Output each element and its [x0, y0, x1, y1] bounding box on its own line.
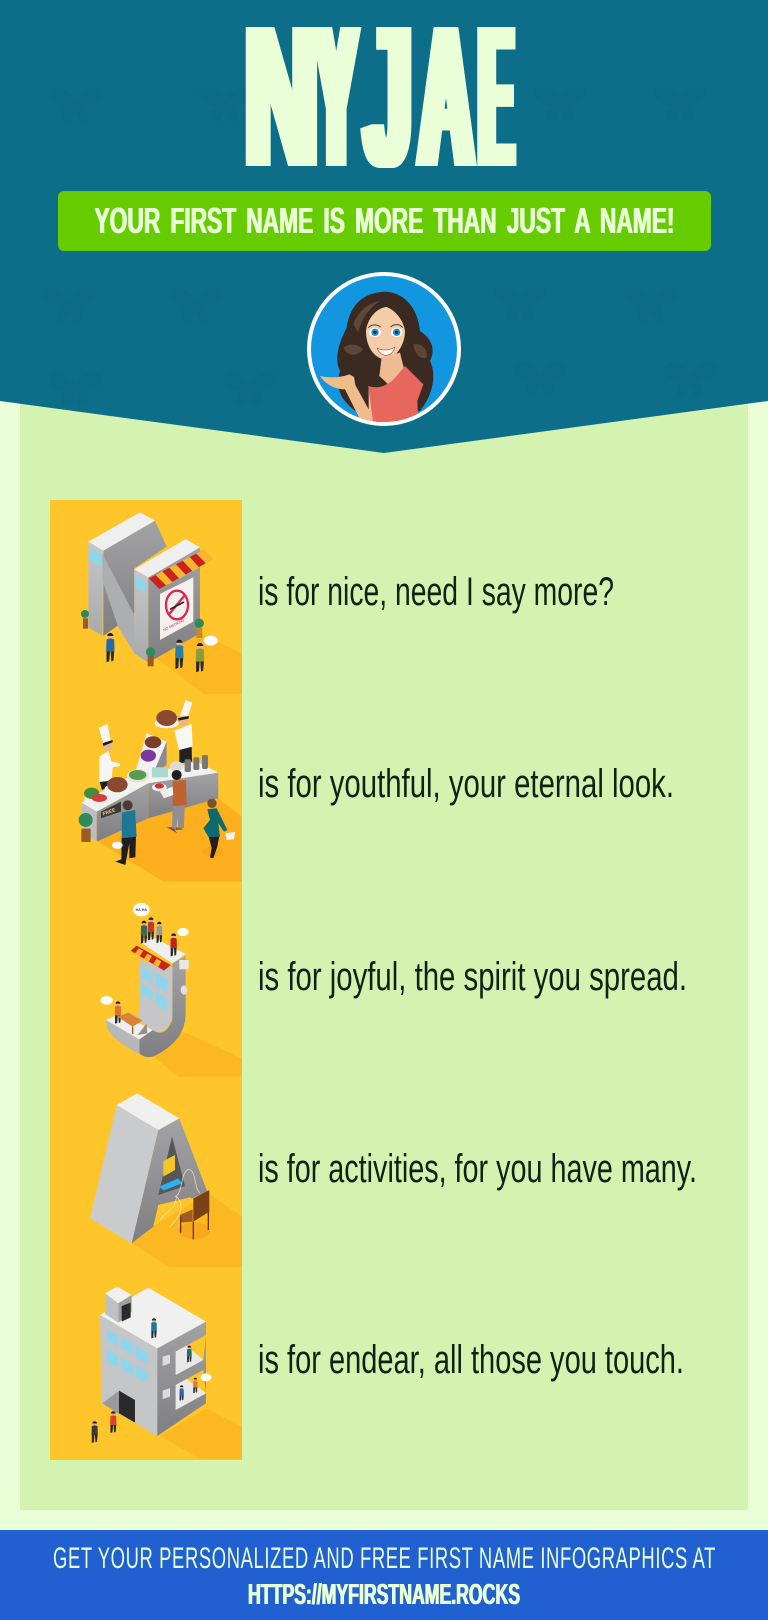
balconies [163, 1335, 211, 1410]
illustration: letter E building [92, 1287, 242, 1459]
desk and worker [101, 996, 147, 1035]
label: free [101, 802, 121, 818]
title [245, 0, 516, 209]
text: N: is for nice, need I say more? [258, 570, 614, 614]
label: free: FREE [102, 807, 117, 818]
sign: no smoking [160, 577, 193, 640]
footer [0, 1530, 768, 1620]
chair [178, 1190, 210, 1239]
rooftop people [133, 903, 189, 956]
rooftop people: HA HA [136, 908, 147, 912]
illustration: buffet counter Y [79, 700, 242, 882]
subtitle banner [58, 191, 711, 251]
footer: HTTPS://MYFIRSTNAME.ROCKS [248, 1579, 520, 1611]
panel: content background [20, 395, 748, 1510]
food [84, 710, 208, 805]
illustration: letter A building [90, 1093, 242, 1267]
sign: no smoking: NO SMOKING [163, 618, 185, 632]
avatar: woman in circle [307, 272, 461, 426]
illustration: letter J building [101, 903, 242, 1077]
panel: illustration column [50, 500, 242, 1460]
chefs [99, 700, 193, 790]
illustration: letter N building [81, 512, 242, 694]
panel: header [0, 0, 768, 453]
customers [112, 770, 235, 865]
